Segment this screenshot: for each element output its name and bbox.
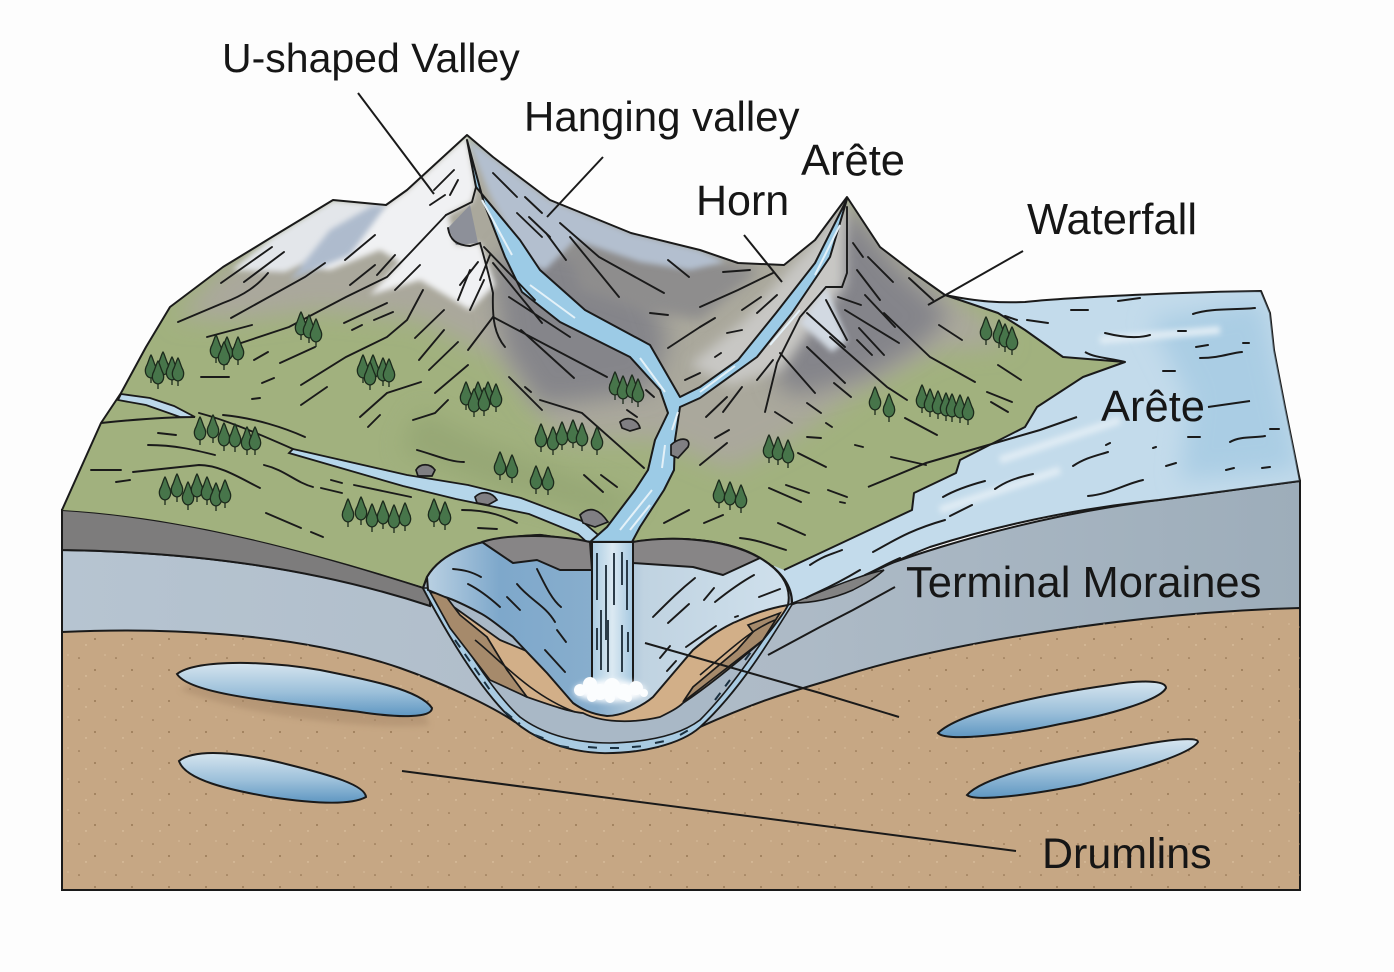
- main river system and tributaries: [118, 140, 847, 545]
- label: Waterfall: Waterfall: [1027, 196, 1197, 244]
- label: Arête right: Arête: [1101, 383, 1205, 431]
- leader line: Arête right: [868, 401, 1250, 487]
- foam: [574, 677, 648, 703]
- label: Drumlins: Drumlins: [1042, 830, 1212, 878]
- land and mountain mass: [62, 135, 1125, 588]
- cross-section bowl with waterfall: [423, 535, 793, 753]
- leader lines: Terminal Moraines: [645, 587, 899, 717]
- basin: [427, 535, 789, 716]
- label: Horn: Horn: [696, 177, 789, 225]
- leader line: Horn: [744, 235, 782, 282]
- label: Terminal Moraines: Terminal Moraines: [906, 559, 1261, 607]
- ice tube lining: [423, 588, 793, 753]
- label: U-shaped Valley: U-shaped Valley: [222, 35, 520, 81]
- sand base block with drumlin ground: [62, 481, 1300, 890]
- mountain shading: [175, 135, 1010, 520]
- hachure and ridge lines on mountains: [91, 170, 1021, 550]
- waterfall: [592, 542, 633, 690]
- label: Arête top: Arête: [801, 137, 905, 185]
- leader line: Waterfall: [928, 251, 1023, 305]
- leader line: Hanging valley: [547, 157, 603, 217]
- leader line: Drumlins: [402, 771, 1016, 851]
- trees: [145, 312, 1018, 533]
- glacial landforms block diagram: [61, 42, 1301, 891]
- glacier ice sheet: [770, 291, 1300, 605]
- label: Hanging valley: Hanging valley: [524, 93, 800, 140]
- sediment layers: [430, 590, 788, 721]
- back wall: [482, 536, 760, 575]
- leader line: U-shaped Valley: [358, 93, 434, 194]
- drumlin mounds: [177, 663, 1198, 803]
- rocks: [416, 419, 689, 527]
